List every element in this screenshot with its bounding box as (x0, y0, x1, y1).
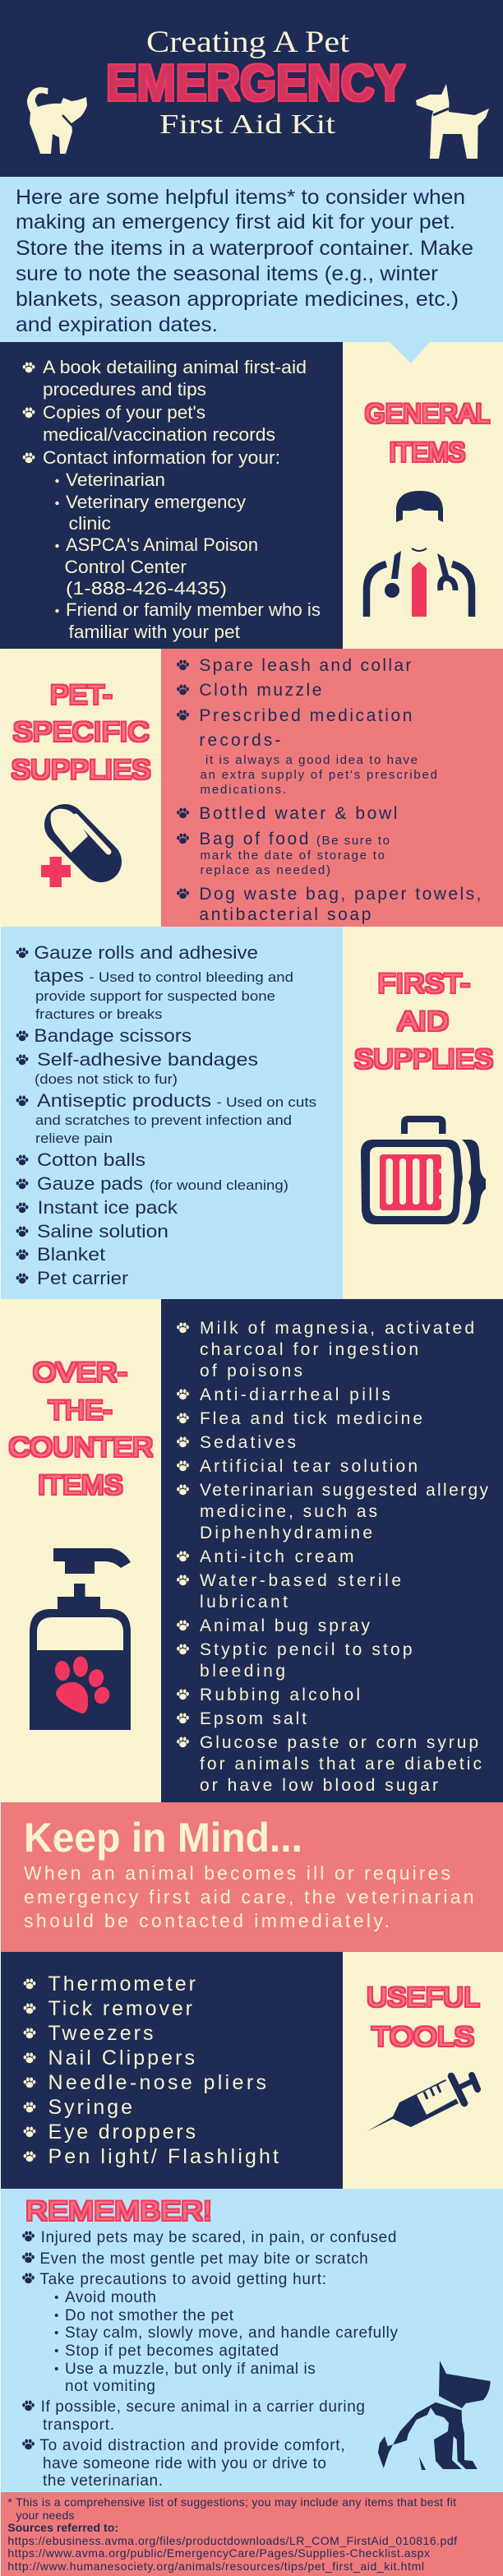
heading: keep in mind: Keep in Mind... (24, 1815, 302, 1861)
list: over-the-counter items: Sedatives (200, 1433, 296, 1452)
list: general items: Contact information for your: (43, 447, 280, 468)
list: over-the-counter items: Epsom salt (200, 1709, 307, 1728)
list: over-the-counter items: Milk of magnesia, activated (200, 1319, 474, 1338)
list: first-aid supplies: Self-adhesive bandages (37, 1049, 258, 1070)
list: useful tools: Pen light/ Flashlight (48, 2145, 279, 2168)
list: pet-specific supplies: Spare leash and collar (199, 656, 411, 675)
icon: pill with cross (41, 809, 108, 887)
text block: sources: https://www.avma.org/public/EmergencyCare/Pages/Supplies-Checklist.aspx (7, 2546, 430, 2560)
list: pet-specific supplies: Cloth muzzle (199, 681, 321, 700)
list: general items: (1-888-426-4435) (66, 578, 227, 599)
list: over-the-counter items: for animals that are diabetic (200, 1755, 482, 1774)
heading: over-the-counter items: OVER- (33, 1357, 127, 1387)
icon: veterinarian (367, 491, 472, 617)
text block: intro paragraph: blankets, season appropriate medicines, etc.) (16, 288, 459, 311)
list: first-aid supplies: - Used on cuts (217, 1094, 316, 1110)
text block: sources (7, 2521, 457, 2573)
panel: header (0, 0, 503, 177)
list: useful tools: Tweezers (48, 2022, 153, 2045)
list: remember: Use a muzzle, but only if animal is (65, 2361, 316, 2378)
list: remember: the veterinarian. (43, 2472, 163, 2490)
list: first-aid supplies: Cotton balls (37, 1149, 145, 1170)
list: remember: To avoid distraction and provide comfort, (39, 2437, 345, 2454)
text block: sources: https://ebusiness.avma.org/files/productdownloads/LR_COM_FirstAid_010816.pdf (7, 2534, 457, 2547)
title line: EMERGENCY: EMERGENCY (106, 55, 405, 112)
heading: over-the-counter items: THE- (48, 1395, 112, 1425)
list: useful tools: Tick remover (48, 1997, 192, 2020)
list: remember: Avoid mouth (65, 2289, 156, 2306)
text block: keep in mind message: When an animal becomes ill or requires (24, 1862, 450, 1884)
text block: footnote: your needs (16, 2509, 74, 2522)
list: pet-specific supplies: antibacterial soap (199, 905, 371, 924)
list: general items: Copies of your pet's (43, 402, 205, 423)
heading: pet-specific supplies: SPECIFIC (13, 717, 150, 747)
list: pet-specific supplies: Bottled water & bowl (199, 804, 397, 823)
icon: pet carrier (361, 1116, 486, 1224)
list: remember: Even the most gentle pet may bite or scratch (39, 2250, 368, 2268)
list: pet-specific supplies: it is always a good idea to have (205, 753, 418, 767)
list: first-aid supplies: and scratches to prevent infection and (35, 1112, 292, 1128)
list: remember: transport. (43, 2416, 114, 2434)
title line: Creating A Pet: Creating A Pet (146, 25, 350, 59)
list: useful tools: Eye droppers (48, 2120, 196, 2144)
list: over-the-counter items: Anti-diarrheal pills (200, 1385, 390, 1404)
list: pet-specific supplies: Dog waste bag, paper towels, (199, 885, 481, 904)
list: first-aid supplies: Saline solution (37, 1221, 168, 1242)
list: over-the-counter items: Animal bug spray (200, 1616, 370, 1635)
list: over-the-counter items: Artificial tear solution (200, 1457, 418, 1476)
heading: useful tools: TOOLS (371, 2022, 474, 2051)
icon: cat (27, 87, 87, 154)
text block: intro paragraph: sure to note the seasonal items (e.g., winter (16, 262, 438, 285)
text block: keep in mind message (24, 1862, 474, 1931)
text block: intro paragraph: making an emergency first aid kit for your pet. (16, 210, 455, 234)
list: first-aid supplies: - Used to control bleeding and (89, 969, 293, 985)
list: over-the-counter items: Anti-itch cream (200, 1547, 353, 1566)
panel: general items (0, 342, 503, 649)
list: first-aid supplies: Antiseptic products (37, 1090, 211, 1111)
panel: first-aid supplies (0, 927, 503, 1299)
list: over-the-counter items: of poisons (200, 1362, 302, 1380)
list: pet-specific supplies: Prescribed medication (199, 706, 412, 725)
list: general items (23, 357, 321, 642)
list: useful tools (24, 1972, 279, 2168)
text block: intro paragraph: Here are some helpful items* to consider when (16, 186, 465, 209)
icon: dog (416, 84, 489, 159)
list: general items: familiar with your pet (69, 622, 240, 642)
list: general items: A book detailing animal first-aid (43, 357, 307, 377)
text block: keep in mind message: should be contacted immediately. (24, 1910, 390, 1931)
icon: spray bottle with paw (30, 1548, 131, 1730)
list: over-the-counter items: Rubbing alcohol (200, 1686, 360, 1704)
list: pet-specific supplies: (Be sure to (316, 834, 390, 848)
heading: over-the-counter items (9, 1357, 153, 1500)
list: over-the-counter items: medicine, such as (200, 1502, 377, 1521)
heading: pet-specific supplies: PET- (50, 680, 112, 710)
list: useful tools: Needle-nose pliers (48, 2071, 266, 2094)
text block: footnote: * This is a comprehensive list of suggestions; you may include any items that best fit (7, 2495, 456, 2509)
list: remember: not vomiting (65, 2378, 155, 2395)
heading: first-aid supplies: AID (398, 1006, 449, 1036)
panel: footer notes and sources (0, 2492, 503, 2576)
list: useful tools: Thermometer (48, 1972, 196, 1996)
list: over-the-counter items: or have low blood sugar (200, 1776, 438, 1795)
text block: sources: Sources referred to: (7, 2521, 118, 2534)
list: general items: Veterinary emergency (66, 492, 246, 512)
list: remember: Injured pets may be scared, in pain, or confused (41, 2229, 396, 2246)
panel: useful tools (0, 1952, 503, 2189)
heading: general items (365, 399, 490, 467)
list: remember: If possible, secure animal in a carrier during (41, 2398, 365, 2416)
list: pet-specific supplies (177, 656, 481, 924)
heading: remember: REMEMBER! (25, 2196, 212, 2226)
text block: footnote (7, 2495, 456, 2522)
list: first-aid supplies: relieve pain (35, 1131, 113, 1146)
heading: general items: ITEMS (390, 437, 465, 467)
list: remember: Do not smother the pet (65, 2307, 234, 2324)
heading: useful tools: USEFUL (367, 1982, 480, 2012)
list: useful tools: Syringe (48, 2096, 132, 2119)
list: useful tools: Nail Clippers (48, 2046, 195, 2070)
list: general items: ASPCA's Animal Poison (66, 534, 258, 555)
list: over-the-counter items: Diphenhydramine (200, 1524, 372, 1542)
list: pet-specific supplies: records- (199, 731, 280, 750)
list: pet-specific supplies: mark the date of storage to (201, 849, 385, 863)
list: remember: Stop if pet becomes agitated (65, 2342, 279, 2360)
list: general items: procedures and tips (43, 379, 206, 400)
text block: sources: http://www.humanesociety.org/animals/resources/tips/pet_first_aid_kit.html (7, 2560, 424, 2573)
heading: first-aid supplies (354, 969, 493, 1074)
list: over-the-counter items: charcoal for ingestion (200, 1340, 418, 1359)
list: first-aid supplies (16, 942, 316, 1288)
list: over-the-counter items: Glucose paste or corn syrup (200, 1733, 478, 1752)
list: remember: Stay calm, slowly move, and handle carefully (65, 2324, 398, 2342)
list: first-aid supplies: Gauze rolls and adhesive (34, 942, 258, 963)
panel: keep in mind (0, 1802, 503, 1952)
list: first-aid supplies: fractures or breaks (35, 1006, 163, 1022)
heading: pet-specific supplies: SUPPLIES (12, 755, 150, 784)
list: remember (22, 2229, 398, 2490)
heading: over-the-counter items: COUNTER (9, 1432, 153, 1462)
list: over-the-counter items: Styptic pencil to stop (200, 1640, 413, 1659)
list: over-the-counter items: lubricant (200, 1593, 288, 1612)
list: first-aid supplies: (does not stick to fur) (35, 1071, 178, 1087)
panel: over-the-counter items (0, 1299, 503, 1802)
panel: remember (0, 2189, 503, 2492)
list: first-aid supplies: (for wound cleaning) (150, 1177, 288, 1193)
icon: dog and cat silhouette (378, 2361, 491, 2470)
heading: useful tools (367, 1982, 480, 2051)
title line: First Aid Kit: First Aid Kit (159, 109, 336, 140)
list: first-aid supplies: Bandage scissors (34, 1025, 192, 1046)
text block: intro paragraph: Store the items in a waterproof container. Make (16, 237, 473, 260)
heading: first-aid supplies: SUPPLIES (354, 1044, 493, 1074)
icon: syringe (367, 2075, 478, 2131)
list: first-aid supplies: Instant ice pack (38, 1197, 178, 1218)
list: over-the-counter items: Flea and tick medicine (200, 1409, 422, 1428)
text block: keep in mind message: emergency first aid care, the veterinarian (24, 1886, 474, 1908)
text block: intro paragraph: and expiration dates. (16, 313, 218, 336)
list: general items: Friend or family member who is (66, 599, 321, 620)
list: over-the-counter items: bleeding (200, 1662, 285, 1681)
list: first-aid supplies: tapes (34, 965, 84, 986)
list: pet-specific supplies: replace as needed) (201, 863, 330, 877)
list: pet-specific supplies: an extra supply of pet's prescribed (201, 768, 437, 782)
list: over-the-counter items (177, 1319, 488, 1795)
heading: general items: GENERAL (365, 399, 490, 428)
list: general items: Control Center (64, 557, 187, 577)
list: first-aid supplies: Pet carrier (37, 1268, 128, 1288)
list: first-aid supplies: Gauze pads (37, 1173, 143, 1194)
list: pet-specific supplies: medications. (201, 783, 286, 797)
list: general items: medical/vaccination records (43, 424, 275, 445)
list: first-aid supplies: provide support for suspected bone (35, 988, 275, 1004)
heading: over-the-counter items: ITEMS (38, 1470, 122, 1500)
list: remember: have someone ride with you or drive to (43, 2455, 326, 2472)
list: first-aid supplies: Blanket (37, 1244, 105, 1265)
list: remember: Take precautions to avoid getting hurt: (39, 2271, 326, 2288)
panel: introduction (0, 177, 503, 342)
text block: intro paragraph (16, 186, 473, 336)
list: over-the-counter items: Veterinarian suggested allergy (200, 1481, 488, 1500)
arrow: pointer from intro (390, 342, 430, 363)
list: over-the-counter items: Water-based sterile (200, 1571, 401, 1590)
heading: pet-specific supplies (12, 680, 150, 784)
heading: first-aid supplies: FIRST- (378, 969, 470, 998)
list: pet-specific supplies: Bag of food (199, 830, 308, 849)
list: general items: clinic (69, 513, 111, 534)
list: general items: Veterinarian (66, 469, 165, 490)
panel: pet-specific supplies (0, 649, 503, 927)
